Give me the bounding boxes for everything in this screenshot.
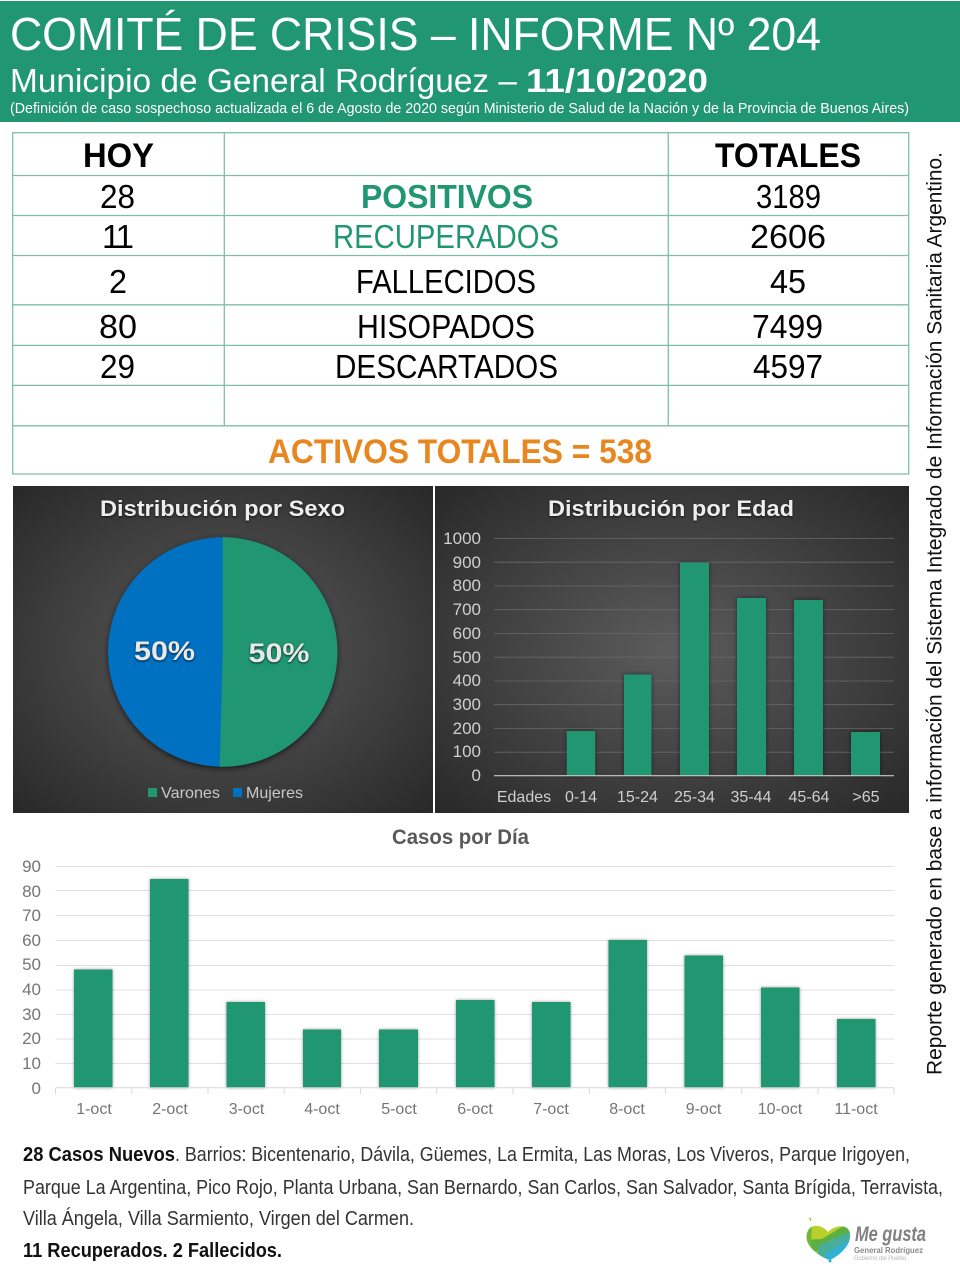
row: positivos: 3189 [756,178,821,215]
y axis labels: 200 [453,719,481,738]
logo tagline: Gobierno del Pueblo [854,1256,907,1262]
y axis labels: 1000 [443,529,481,548]
panel: distribution by age [435,486,909,813]
row: positivos: 28 [100,178,135,215]
x axis labels [497,789,880,806]
y axis labels: 400 [453,671,481,690]
row: positivos: POSITIVOS [361,178,533,215]
row: hisopados: 80 [99,308,137,345]
row: fallecidos: 45 [770,263,806,300]
y axis labels: 70 [22,906,41,925]
row: descartados [100,348,823,385]
y axis labels: 80 [22,882,41,901]
table header: TOTALES: TOTALES [715,137,861,175]
x axis labels: 1-oct [76,1101,112,1118]
label: mujeres 50%: 50% [134,636,195,666]
row: positivos [100,178,821,215]
row: fallecidos: 2 [109,263,127,300]
x axis labels: 4-oct [304,1101,340,1118]
x axis labels: 6-oct [457,1101,493,1118]
case definition note: (Definición de caso sospechoso actualizada el 6 de Agosto de 2020 según Ministerio de Salud de la Nación y de la Provincia de Buenos Aires) [10,100,909,117]
y axis labels: 800 [453,576,481,595]
row: recuperados: RECUPERADOS [333,218,559,255]
x axis labels: 3-oct [229,1101,265,1118]
row: recuperados: 2606 [750,218,826,255]
x axis labels: 2-oct [152,1101,188,1118]
logo municipality name: General Rodríguez [854,1245,923,1255]
heading: distribution by sex: Distribución por Sexo [100,496,345,521]
y axis labels: 90 [22,857,41,876]
y axis labels [443,529,481,785]
summary table [13,133,909,474]
recovered and deceased summary: 11 Recuperados. 2 Fallecidos. [23,1240,282,1262]
row: hisopados: HISOPADOS [357,308,535,345]
x axis labels [76,1101,878,1118]
header banner [0,1,960,122]
row: fallecidos: FALLECIDOS [356,263,536,300]
x axis labels: 11-oct [834,1101,878,1118]
y axis labels: 20 [22,1029,41,1048]
y axis labels: 40 [22,980,41,999]
x axis labels: Edades [497,789,551,806]
x axis labels: 0-14 [565,789,597,806]
active cases total: ACTIVOS TOTALES = 538 [268,433,652,471]
new cases text block: 28 Casos Nuevos [23,1144,175,1166]
heading: cases per day: Casos por Día [392,826,529,849]
age bars [567,562,880,776]
table header: HOY: HOY [83,137,154,175]
daily bars [74,879,876,1088]
heading: distribution by age: Distribución por Edad [548,496,794,521]
y axis labels: 100 [453,742,481,761]
x axis labels: 45-64 [789,789,830,806]
icon: heart [804,1218,853,1262]
y axis labels [22,857,41,1098]
x axis labels: 9-oct [686,1101,722,1118]
row: descartados: 29 [100,348,135,385]
x axis labels: 10-oct [758,1101,803,1118]
y axis labels: 10 [22,1054,41,1073]
y axis labels: 300 [453,695,481,714]
y axis labels: 900 [453,553,481,572]
x axis labels: 7-oct [533,1101,569,1118]
y axis labels: 600 [453,624,481,643]
legend [148,785,303,802]
legend: Mujeres [246,785,303,802]
row: fallecidos [109,263,806,300]
row: hisopados: 7499 [752,308,823,345]
y axis labels: 30 [22,1005,41,1024]
new cases text block: Villa Ángela, Villa Sarmiento, Virgen del Carmen. [23,1207,414,1230]
x axis labels: 5-oct [381,1101,417,1118]
row: descartados: 4597 [753,348,823,385]
new cases text block [23,1144,943,1262]
x axis labels: >65 [852,789,880,806]
row: recuperados [102,218,826,255]
x axis labels: 8-oct [609,1101,645,1118]
y axis labels: 60 [22,931,41,950]
chart: cases per day [22,826,894,1118]
y axis labels: 500 [453,648,481,667]
y axis labels: 0 [472,766,481,785]
logo wordmark: Me gusta [855,1223,926,1246]
x axis labels: 15-24 [617,789,658,806]
title: COMITÉ DE CRISIS – INFORME Nº 204 [10,8,821,60]
pie chart [108,537,337,767]
y axis labels: 0 [32,1079,41,1098]
y axis labels: 700 [453,600,481,619]
logo: Me gusta General Rodríguez [804,1218,926,1262]
subtitle with date: 11/10/2020 [526,62,708,99]
legend: Varones [161,785,220,802]
subtitle with date: Municipio de General Rodríguez – [10,62,518,99]
row: descartados: DESCARTADOS [335,348,558,385]
row: recuperados: 11 [102,218,134,255]
panel: distribution by sex [13,486,433,813]
label: varones 50%: 50% [248,638,310,668]
y axis labels: 50 [22,955,41,974]
x axis labels: 35-44 [731,789,772,806]
vertical source note: Reporte generado en base a información del Sistema Integrado de Información Sanitaria Argentino. [924,152,946,1075]
row: hisopados [99,308,823,345]
x axis labels: 25-34 [674,789,715,806]
